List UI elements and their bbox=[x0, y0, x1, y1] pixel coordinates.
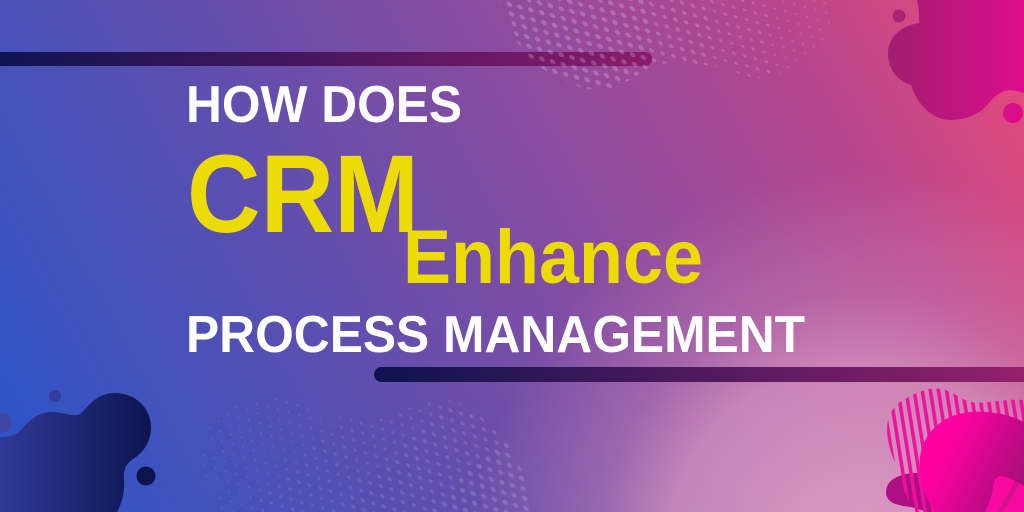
blob: main magenta shape bbox=[920, 412, 1024, 512]
title line: How Does: HOW DOES bbox=[186, 76, 462, 134]
blob: striped shape bbox=[887, 388, 1024, 512]
blob: bottom left shape bbox=[0, 393, 151, 512]
blob group: bottom right bbox=[886, 388, 1024, 512]
halftone dots: bottom bbox=[202, 396, 529, 512]
blob: dark magenta shape bbox=[886, 473, 945, 512]
blob: circle left bbox=[0, 413, 12, 433]
blob: top right shape bbox=[888, 0, 1024, 120]
blob: front magenta shape bbox=[985, 476, 1024, 512]
bottom bar bbox=[374, 367, 1024, 382]
blob: front stripe bbox=[998, 481, 1020, 512]
top bar bbox=[0, 52, 652, 66]
blob: small circle top bbox=[892, 10, 906, 22]
halftone dots: top bbox=[500, 0, 830, 90]
title line: Process Management: PROCESS MANAGEMENT bbox=[186, 306, 805, 364]
blob: circle top bbox=[49, 390, 61, 402]
title word: Enhance: Enhance bbox=[403, 215, 703, 300]
blob: circle right bbox=[136, 466, 156, 486]
blob group: top right bbox=[888, 0, 1024, 123]
blob group: bottom left bbox=[0, 390, 156, 512]
blob: small circle right bbox=[1003, 103, 1023, 123]
title word: CRM: CRM bbox=[187, 133, 419, 256]
